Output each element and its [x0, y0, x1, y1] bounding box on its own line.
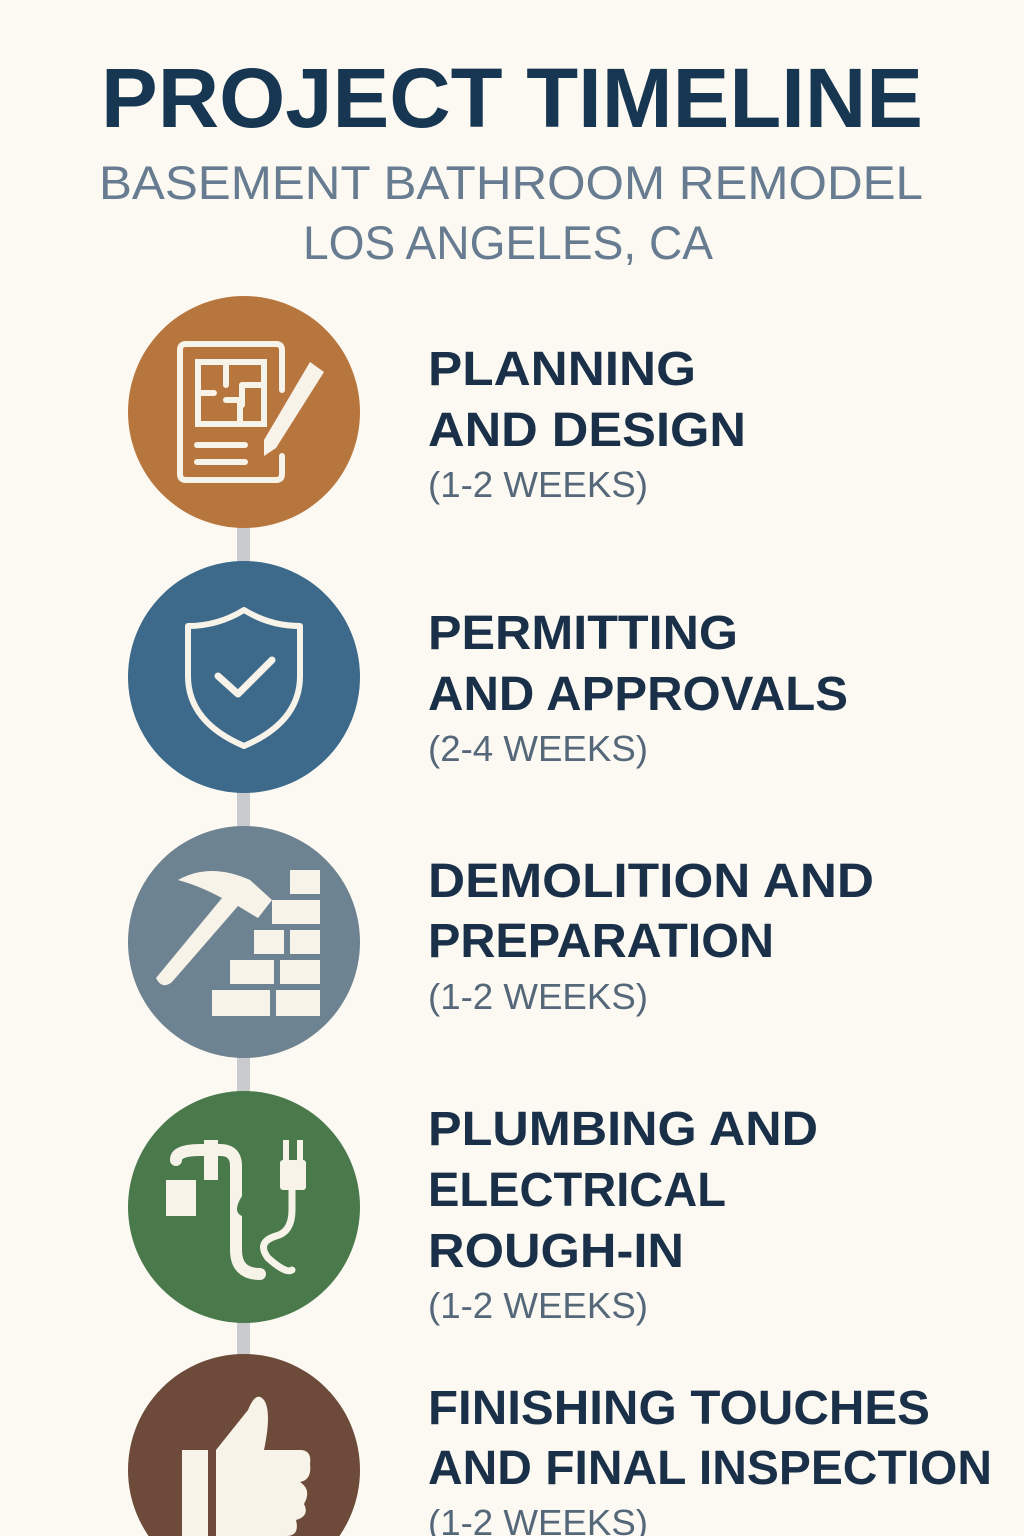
step 5: finishing — [128, 1354, 992, 1536]
icon: pipe and plug — [128, 1091, 360, 1323]
step 4: plumbing: ROUGH-IN — [428, 1225, 684, 1278]
heading: FINISHING TOUCHES — [428, 1382, 930, 1435]
icon: shield check — [128, 561, 360, 793]
step 3: demolition — [128, 826, 874, 1058]
step 5: finishing: AND FINAL INSPECTION — [428, 1442, 992, 1495]
duration: (1-2 WEEKS) — [428, 464, 648, 505]
step 4: plumbing: ELECTRICAL — [428, 1164, 726, 1217]
title: PROJECT TIMELINE — [101, 51, 923, 145]
heading: PLANNING — [428, 343, 696, 396]
subtitle — [99, 156, 923, 269]
icon: hammer and bricks — [128, 826, 360, 1058]
heading: PERMITTING — [428, 607, 738, 660]
heading: PLUMBING AND — [428, 1103, 818, 1156]
duration: (1-2 WEEKS) — [428, 976, 648, 1017]
step 4: plumbing — [128, 1091, 818, 1326]
timeline connector — [237, 420, 250, 1520]
step 1: planning — [128, 296, 746, 528]
step 3: demolition: PREPARATION — [428, 915, 774, 968]
step 2: permitting: AND APPROVALS — [428, 668, 848, 721]
duration: (2-4 WEEKS) — [428, 728, 648, 769]
heading: DEMOLITION AND — [428, 855, 874, 908]
icon: thumbs up — [128, 1354, 360, 1536]
step 1: planning: AND DESIGN — [428, 404, 746, 457]
duration: (1-2 WEEKS) — [428, 1285, 648, 1326]
subtitle: LOS ANGELES, CA — [303, 216, 714, 269]
icon: blueprint and pencil — [128, 296, 360, 528]
step 2: permitting — [128, 561, 848, 793]
subtitle: BASEMENT BATHROOM REMODEL — [99, 156, 923, 209]
